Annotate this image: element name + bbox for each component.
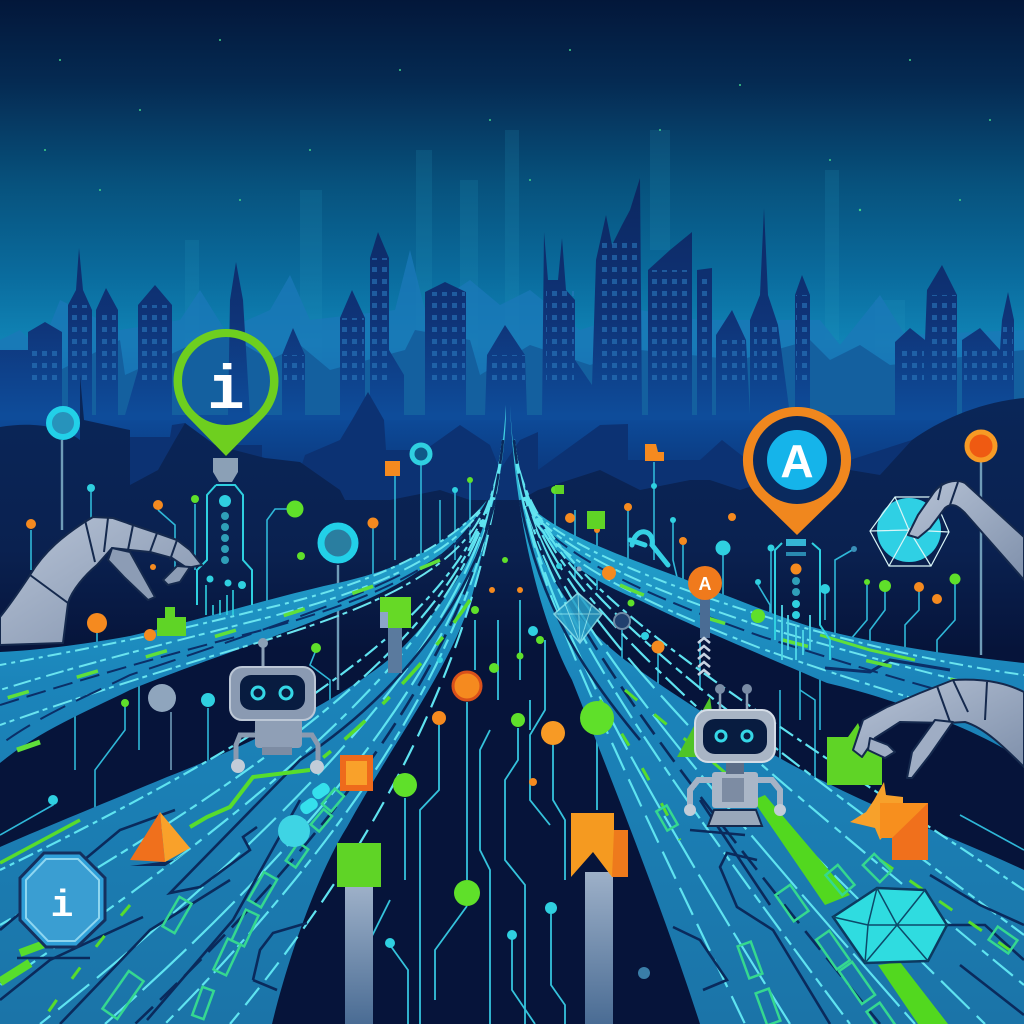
- dark hills and near silhouettes: [0, 375, 1024, 1024]
- pin: info (green): [174, 329, 278, 615]
- skyline: middle layer: [0, 330, 1024, 420]
- left robot: [230, 638, 324, 774]
- distant light towers: [185, 130, 905, 380]
- small A marker: [688, 566, 722, 675]
- nodes: [26, 409, 995, 979]
- small A marker: A: [698, 574, 712, 594]
- shape: orange square: [340, 755, 373, 791]
- skyline: front buildings: [0, 178, 1024, 420]
- small robotic wire globe: [870, 497, 949, 566]
- lower right robot arm: [853, 680, 1024, 778]
- column with green cube: [337, 843, 381, 1024]
- octagon info badge: i: [51, 885, 73, 928]
- orange starburst and cube: [850, 782, 928, 860]
- central circuit traces: [370, 600, 597, 1024]
- column with orange chevron: [571, 813, 628, 1024]
- green puzzle shape: [157, 607, 186, 636]
- road: centre right: [510, 405, 1024, 1024]
- road: centre left: [0, 405, 506, 1024]
- pin: info (green): i: [207, 356, 245, 427]
- right robot: [684, 684, 786, 826]
- road: far right: [527, 502, 1024, 762]
- crystal: teal polyhedron: [833, 888, 947, 963]
- stars: [44, 39, 991, 211]
- crystal: small diamond: [554, 593, 602, 643]
- green triangle: [677, 697, 718, 757]
- green cube (right): [827, 723, 882, 785]
- mid-tone silhouettes: [130, 392, 912, 560]
- road: far left: [0, 500, 487, 763]
- skyline: far layer: [0, 250, 1024, 420]
- small orange and green cubes: [385, 444, 664, 529]
- upper right robot arm: [908, 481, 1024, 580]
- background circuit traces: [0, 440, 1024, 850]
- pin: A (orange): [743, 407, 851, 660]
- pin: A (orange): A: [780, 435, 814, 487]
- left robot arm: [0, 517, 202, 645]
- small distant robot arm: [630, 532, 668, 565]
- green cube on post: [380, 597, 411, 673]
- octagon info badge: [20, 853, 105, 947]
- shape: orange pyramid: [130, 812, 190, 866]
